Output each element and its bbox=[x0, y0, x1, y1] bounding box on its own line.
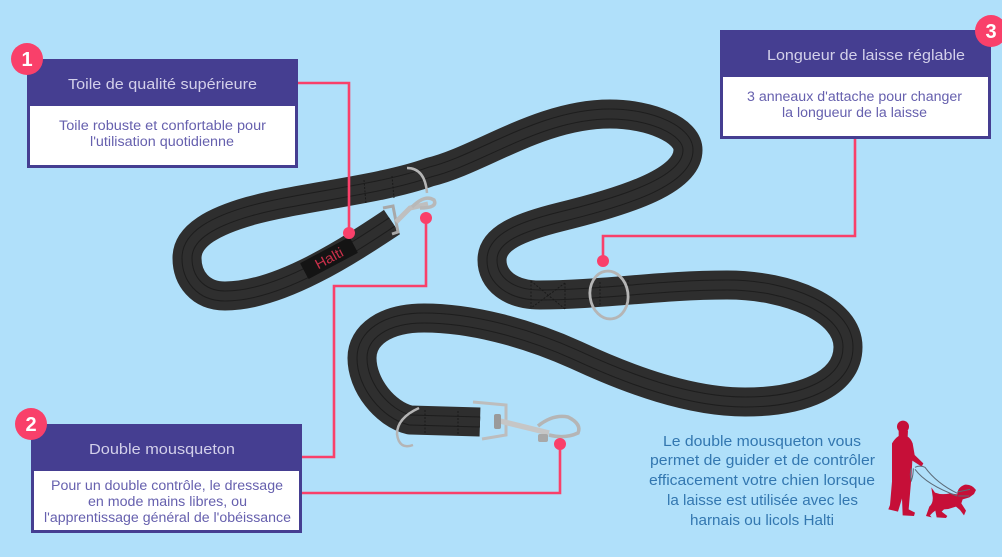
Halti label bbox=[300, 237, 358, 279]
connector line: box 1 to strap bbox=[298, 83, 355, 239]
panel 3: longueur bbox=[720, 30, 991, 139]
description 3: 3 anneaux d'attache pour changer bbox=[747, 89, 963, 104]
side note: la laisse est utilisée avec les bbox=[667, 493, 858, 509]
adjustment ring bbox=[587, 269, 631, 321]
badge 3 bbox=[975, 15, 1002, 47]
icon: person walking dog bbox=[888, 421, 976, 518]
badge 1 bbox=[11, 43, 43, 75]
description 2: l'apprentissage général de l'obéissance bbox=[44, 510, 291, 525]
description 3: la longueur de la laisse bbox=[782, 105, 927, 120]
heading 3: Longueur de laisse réglable bbox=[767, 47, 965, 64]
heading 1: Toile de qualité supérieure bbox=[68, 76, 257, 93]
Halti label: Halti bbox=[312, 244, 346, 272]
side note: efficacement votre chien lorsque bbox=[649, 473, 875, 489]
bottom clip and ring bbox=[397, 402, 579, 446]
stitching bbox=[364, 176, 628, 435]
dog leash bbox=[910, 466, 970, 496]
side note: Le double mousqueton vous bbox=[663, 434, 861, 450]
connector line: box 3 to ring bbox=[597, 139, 855, 267]
heading 2: Double mousqueton bbox=[89, 441, 235, 458]
leash bbox=[187, 114, 848, 446]
connector line: box 2 to top clip bbox=[302, 212, 432, 457]
description 2: en mode mains libres, ou bbox=[88, 494, 247, 509]
dog bbox=[926, 485, 976, 518]
side note: permet de guider et de contrôler bbox=[650, 453, 875, 469]
top clip and ring bbox=[383, 168, 435, 234]
connector line: box 2 to bottom clip bbox=[302, 438, 566, 493]
leash strap bbox=[187, 114, 848, 422]
badge 2: 2 bbox=[25, 414, 37, 436]
badge 3: 3 bbox=[985, 21, 997, 43]
description 1: l'utilisation quotidienne bbox=[90, 134, 234, 149]
badge 1: 1 bbox=[21, 49, 33, 71]
description 1: Toile robuste et confortable pour bbox=[59, 118, 267, 133]
side note: harnais ou licols Halti bbox=[690, 513, 834, 529]
description 2: Pour un double contrôle, le dressage bbox=[51, 478, 283, 493]
badge 2 bbox=[15, 408, 47, 440]
panel 1: toile bbox=[27, 59, 298, 168]
person bbox=[888, 421, 923, 516]
panel 2: mousqueton bbox=[31, 424, 302, 533]
